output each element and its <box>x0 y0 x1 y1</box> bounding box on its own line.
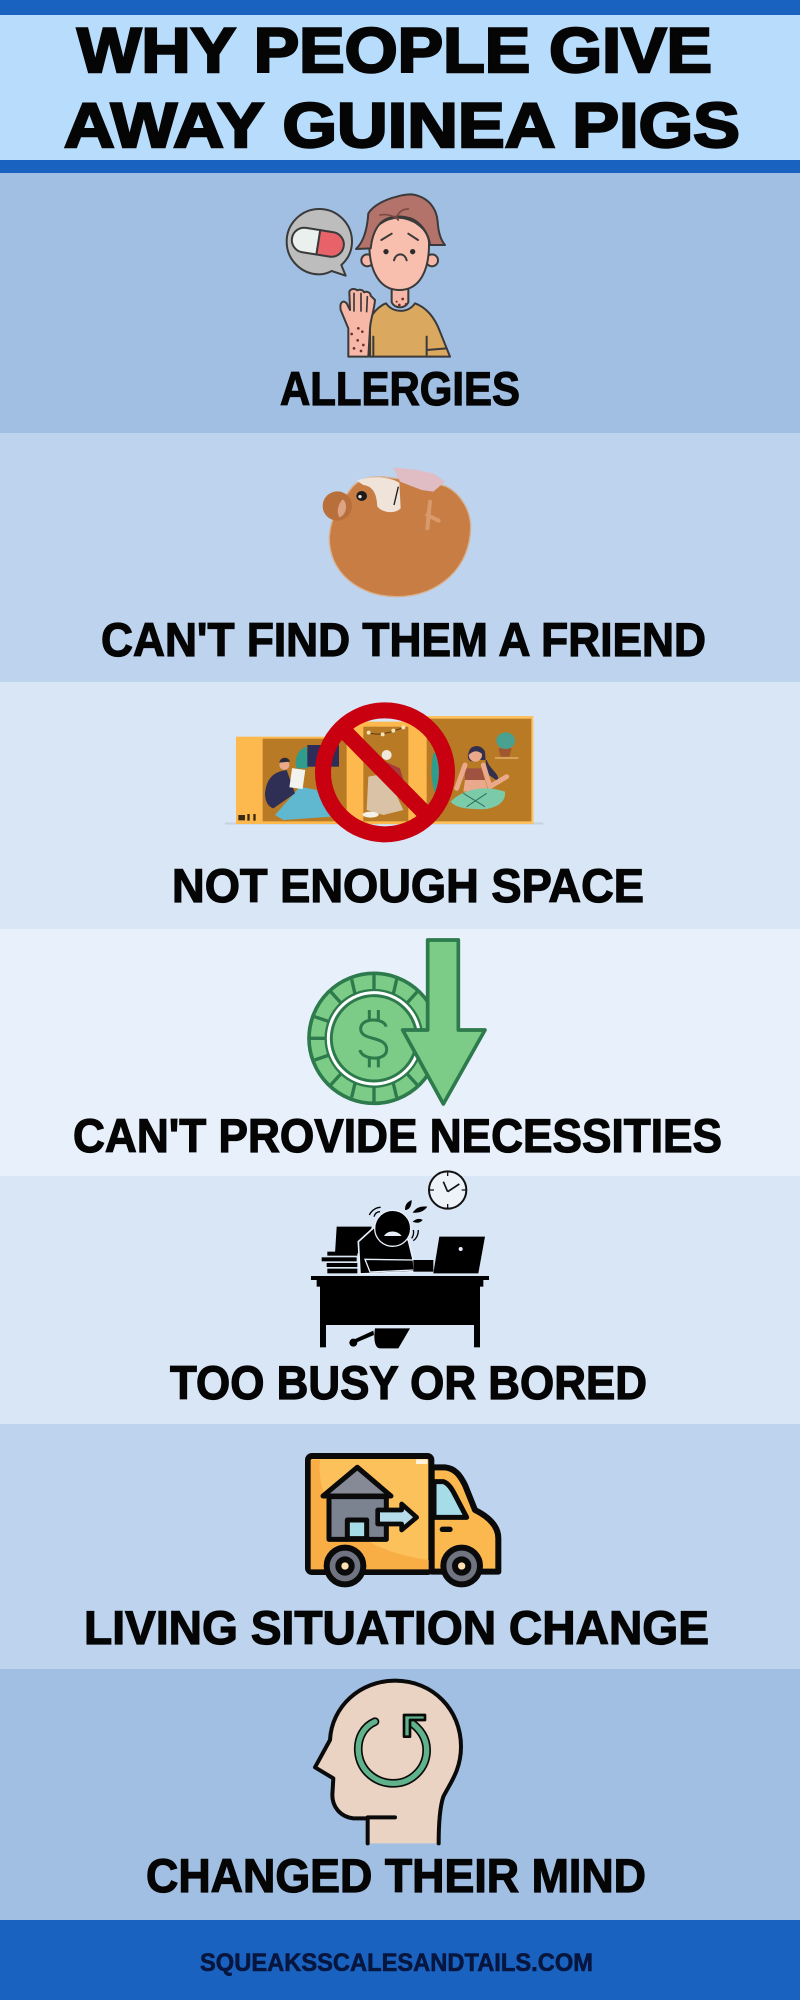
icon: guinea pig <box>323 467 471 597</box>
cargo box <box>308 1456 431 1572</box>
title: WHY PEOPLE GIVE <box>77 16 712 86</box>
person sitting in the middle <box>363 750 403 818</box>
sweat drops <box>405 1200 427 1223</box>
stack of books <box>322 1252 357 1273</box>
panel: too busy or bored <box>0 1171 800 1424</box>
icon: moving truck <box>308 1456 498 1584</box>
title <box>64 16 740 161</box>
desk <box>311 1276 489 1347</box>
panel: changed their mind <box>0 1669 800 1920</box>
footer website: SQUEAKSSCALESANDTAILS.COM <box>200 1949 593 1977</box>
wheels <box>327 1548 480 1584</box>
icon: small apartment rooms with no sign <box>225 710 543 834</box>
person meditating <box>451 746 507 809</box>
icon: coin with falling arrow <box>309 940 485 1104</box>
person reading <box>265 758 332 820</box>
circular arrow <box>358 1715 427 1783</box>
icon: no sign <box>323 710 447 834</box>
label: changed their mind: CHANGED THEIR MIND <box>146 1849 646 1902</box>
label: not enough space: NOT ENOUGH SPACE <box>172 859 644 912</box>
icon: stressed person at desk <box>311 1171 489 1348</box>
dollar sign <box>360 1010 387 1067</box>
label: too busy or bored: TOO BUSY OR BORED <box>170 1356 647 1409</box>
panel: allergies <box>0 173 800 433</box>
panel: title header <box>0 0 800 173</box>
hair <box>356 194 445 249</box>
label: living situation change: LIVING SITUATION CHANGE <box>84 1601 709 1654</box>
icon: pill speech bubble <box>287 209 352 276</box>
small box marks <box>238 814 256 821</box>
panel: can't provide necessities <box>0 929 800 1176</box>
label: can't find them a friend: CAN'T FIND THEM A FRIEND <box>101 613 706 666</box>
chair back <box>335 1227 372 1253</box>
ears <box>361 254 373 266</box>
panel: footer <box>0 1920 800 2000</box>
label: allergies: ALLERGIES <box>280 362 520 415</box>
face <box>369 218 429 290</box>
cab <box>432 1467 498 1572</box>
label: can't provide necessities: CAN'T PROVIDE NECESSITIES <box>73 1109 722 1162</box>
icon: person with allergies <box>287 194 450 357</box>
panel: can't find them a friend <box>0 433 800 682</box>
legs and chair base <box>349 1328 410 1348</box>
icon: head with circular arrow <box>315 1681 461 1843</box>
shirt <box>370 303 450 357</box>
moving arrow <box>378 1504 417 1530</box>
hand and arm <box>340 289 375 357</box>
house <box>323 1467 391 1539</box>
string lights <box>367 725 405 736</box>
body and head <box>358 1210 414 1274</box>
clock <box>429 1171 466 1209</box>
neck <box>392 285 408 307</box>
panel: not enough space <box>0 682 800 929</box>
laptop <box>413 1237 485 1273</box>
panel: living situation change <box>0 1424 800 1669</box>
plant and shelf <box>296 732 518 793</box>
title: AWAY GUINEA PIGS <box>64 91 740 161</box>
